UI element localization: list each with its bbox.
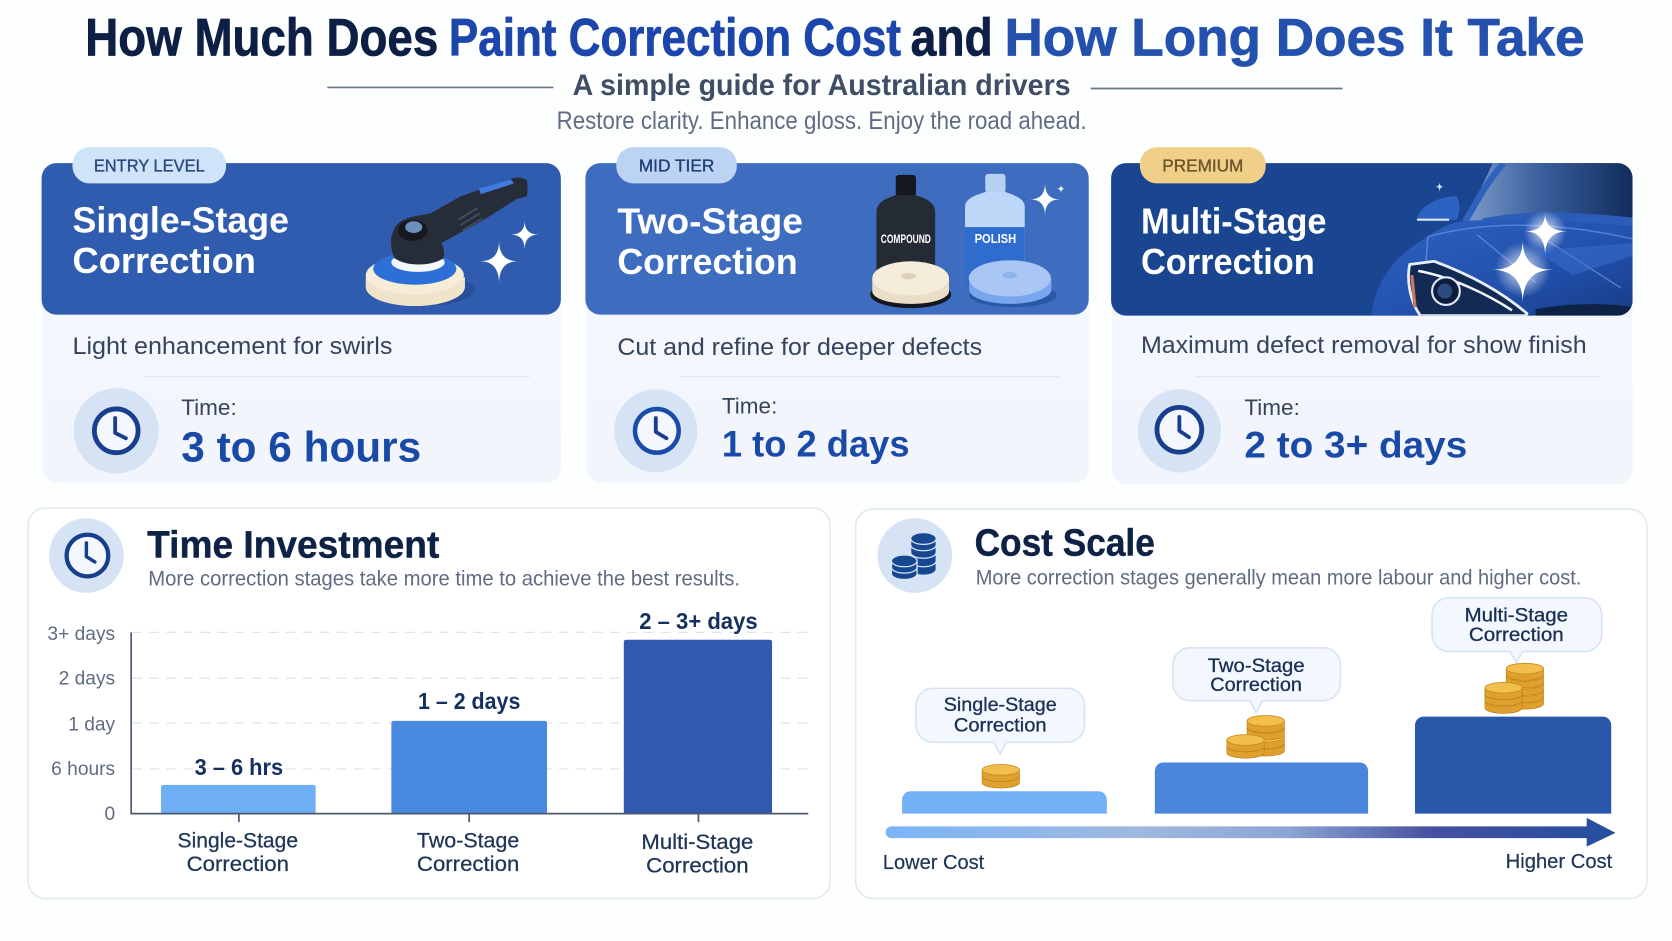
icon: car <box>1371 163 1633 316</box>
time block: 2 to 3+ days <box>1244 423 1467 465</box>
time block: 3 to 6 hours <box>181 424 421 472</box>
title: How Much Does <box>85 8 438 67</box>
icon: compound bottle <box>870 175 951 308</box>
icon: polisher <box>366 178 528 306</box>
x-axis labels: Correction <box>417 852 519 876</box>
badge: premium <box>1140 147 1266 183</box>
description: Light enhancement for swirls <box>73 333 392 360</box>
tagline: Restore clarity. Enhance gloss. Enjoy the road ahead. <box>557 108 1087 135</box>
badge: entry level: ENTRY LEVEL <box>94 156 205 176</box>
time block: Time: <box>722 394 777 419</box>
subtitle: A simple guide for Australian drivers <box>573 69 1071 102</box>
bar value labels: 3 – 6 hrs <box>195 754 283 780</box>
description: Cut and refine for deeper defects <box>617 334 982 361</box>
arrow: cost scale <box>886 818 1615 847</box>
callout: two-stage: Two-Stage <box>1208 655 1305 677</box>
y-axis labels: 1 day <box>68 714 116 735</box>
callout: single-stage <box>916 688 1084 754</box>
bar value labels: 2 – 3+ days <box>639 608 758 634</box>
panel: two-stage card <box>585 147 1089 483</box>
time block: 1 to 2 days <box>722 422 910 464</box>
bar value labels: 1 – 2 days <box>418 688 520 714</box>
title: Paint Correction Cost <box>449 8 901 67</box>
card heading <box>1141 201 1327 282</box>
card heading <box>73 199 289 281</box>
icon: coins <box>878 518 952 593</box>
badge: mid tier: MID TIER <box>639 156 714 176</box>
step: multi-stage <box>1415 717 1611 814</box>
card heading: Correction <box>617 241 798 282</box>
x-axis labels: Two-Stage <box>417 829 519 853</box>
y-axis labels: 2 days <box>59 669 115 690</box>
bar: single-stage <box>161 785 316 814</box>
step: single-stage <box>902 791 1107 814</box>
time block: Time: <box>181 395 237 420</box>
icon: clock <box>1138 389 1221 472</box>
title <box>85 8 1585 67</box>
heading: Cost Scale <box>975 522 1155 565</box>
bar: two-stage <box>391 721 547 814</box>
y-axis labels: 3+ days <box>47 624 115 645</box>
subheading: More correction stages take more time to achieve the best results. <box>148 567 740 590</box>
subheading: More correction stages generally mean more labour and higher cost. <box>976 566 1581 589</box>
heading: Time Investment <box>147 524 440 567</box>
icon: compound bottle: COMPOUND <box>881 232 931 246</box>
card heading: Correction <box>73 240 256 281</box>
x-axis labels: Correction <box>646 853 749 877</box>
label: higher cost: Higher Cost <box>1506 851 1613 873</box>
x-axis labels: Multi-Stage <box>641 830 753 854</box>
time block <box>722 394 910 464</box>
card heading: Two-Stage <box>617 201 803 242</box>
icon: coins single-stage <box>982 765 1019 788</box>
callout: multi-stage <box>1432 598 1602 662</box>
icon: clock <box>74 388 159 473</box>
time block <box>1244 395 1467 465</box>
panel: single-stage card <box>42 147 561 483</box>
y-axis labels: 0 <box>104 804 115 825</box>
callout: two-stage: Correction <box>1210 674 1302 696</box>
panel: time investment <box>28 508 830 898</box>
icon: clock <box>49 518 124 593</box>
bar chart <box>47 608 808 877</box>
icon: sparkles <box>1435 182 1568 304</box>
time block <box>181 395 421 472</box>
icon: coins multi-stage <box>1485 663 1544 713</box>
icon: sparkles <box>480 221 538 284</box>
title: How Long Does It Take <box>1004 8 1585 67</box>
callout: two-stage <box>1173 648 1340 712</box>
icon: polish bottle <box>965 174 1057 307</box>
description: Maximum defect removal for show finish <box>1141 332 1587 359</box>
card heading: Single-Stage <box>73 199 289 240</box>
callout: single-stage: Correction <box>954 715 1047 737</box>
card heading: Correction <box>1141 241 1315 282</box>
icon: sparkles <box>1030 183 1065 215</box>
callout: multi-stage: Multi-Stage <box>1465 605 1568 627</box>
badge: mid tier <box>616 147 737 183</box>
callout: single-stage: Single-Stage <box>944 694 1057 716</box>
x-axis labels: Single-Stage <box>178 829 298 853</box>
time block: Time: <box>1244 395 1300 420</box>
x-axis labels <box>178 829 753 877</box>
x-axis labels: Correction <box>187 852 289 876</box>
panel: cost scale <box>856 509 1647 898</box>
card heading: Multi-Stage <box>1141 201 1327 242</box>
step: two-stage <box>1155 762 1368 814</box>
callout: multi-stage: Correction <box>1469 624 1564 646</box>
panel: multi-stage card <box>1111 147 1633 484</box>
card heading <box>617 201 803 282</box>
icon: polish bottle: POLISH <box>975 231 1016 246</box>
y-axis labels: 6 hours <box>51 759 115 780</box>
icon: coins two-stage <box>1227 716 1284 758</box>
y-axis labels <box>47 624 116 825</box>
badge: premium: PREMIUM <box>1162 156 1243 176</box>
label: lower cost: Lower Cost <box>883 852 985 874</box>
badge: entry level <box>73 147 226 183</box>
bar: multi-stage <box>624 640 772 814</box>
title: and <box>911 8 993 67</box>
icon: clock <box>614 389 697 472</box>
bar value labels <box>195 608 758 780</box>
